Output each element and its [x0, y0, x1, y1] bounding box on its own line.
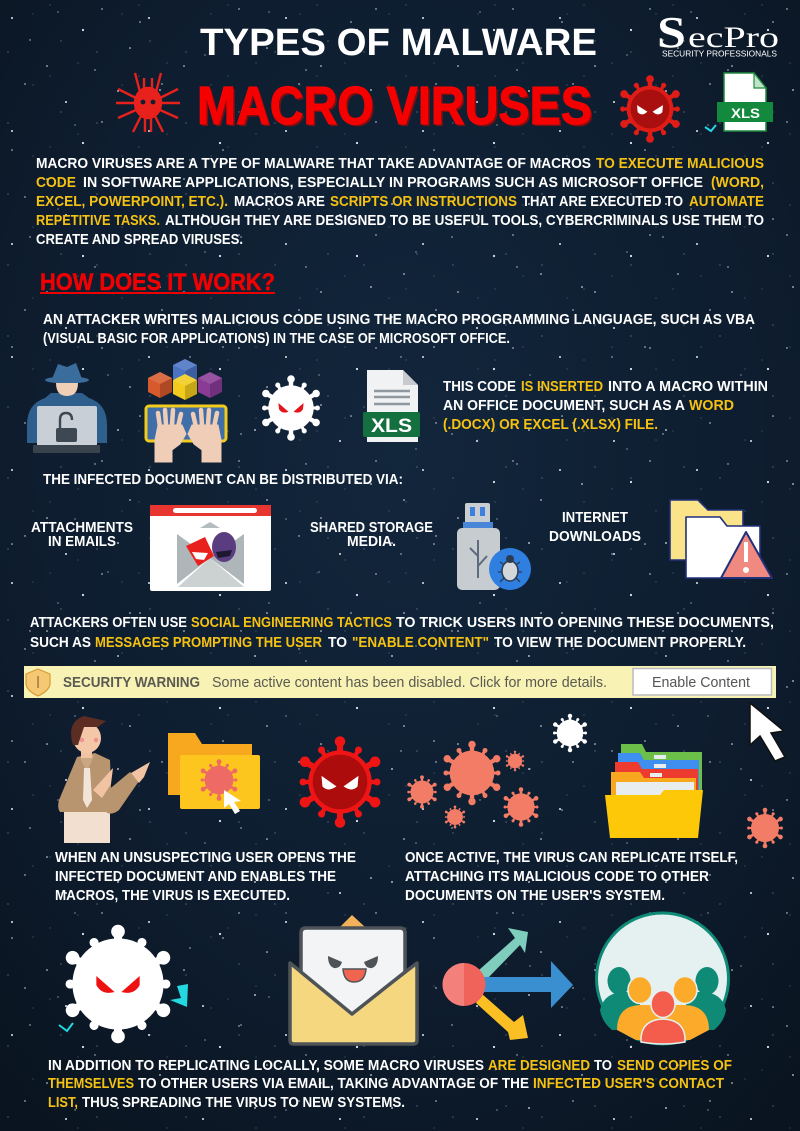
icon: red virus with angry eyes	[619, 75, 681, 143]
icon: typing on keyboard with code blocks	[146, 359, 226, 462]
text: code inserted into macro: INTO A MACRO WITHIN	[608, 379, 768, 395]
text: spreading by email: IN ADDITION TO REPLICATING LOCALLY, SOME MACRO VIRUSES	[48, 1058, 484, 1074]
text: spreading by email: INFECTED USER'S CONTACT	[533, 1076, 724, 1092]
text: code inserted into macro: IS INSERTED	[521, 379, 603, 395]
label: internet downloads	[549, 510, 641, 545]
icon: stack of colored folders	[605, 744, 703, 838]
text: user opens document: INFECTED DOCUMENT AND ENABLES THE	[55, 869, 336, 885]
text: spreading by email: THEMSELVES	[48, 1076, 134, 1092]
icon: XLS document: XLS	[371, 416, 412, 437]
icon: spreading arrows	[442, 928, 573, 1040]
icon: small XLS file: XLS	[731, 105, 760, 121]
text: code inserted into macro: WORD	[689, 398, 734, 414]
logo: SecPro: S	[657, 8, 686, 57]
text: virus replicates: DOCUMENTS ON THE USER'S SYSTEM.	[405, 888, 665, 904]
intro paragraph: IN SOFTWARE APPLICATIONS, ESPECIALLY IN PROGRAMS SUCH AS MICROSOFT OFFICE	[83, 175, 703, 191]
text: spreading by email	[48, 1058, 732, 1111]
icon: infected email window	[150, 505, 271, 591]
label: shared storage media: MEDIA.	[347, 534, 396, 550]
text: user opens document: WHEN AN UNSUSPECTING USER OPENS THE	[55, 850, 356, 866]
intro paragraph: THAT ARE EXECUTED TO	[522, 194, 683, 210]
heading: how does it work: HOW DOES IT WORK?	[40, 269, 275, 296]
text: attacker writes code	[43, 312, 755, 347]
label: shared storage media: SHARED STORAGE	[310, 520, 433, 536]
text: attacker writes code: (VISUAL BASIC FOR APPLICATIONS) IN THE CASE OF MICROSOFT OFFICE.	[43, 331, 510, 347]
text: virus replicates: ATTACHING ITS MALICIOUS CODE TO OTHER	[405, 869, 709, 885]
heading: macro viruses: MACRO VIRUSES	[199, 78, 594, 138]
text: user opens document: MACROS, THE VIRUS IS EXECUTED.	[55, 888, 290, 904]
label: shared storage media	[310, 520, 433, 550]
text: social engineering: ATTACKERS OFTEN USE	[30, 615, 187, 631]
text: code inserted into macro: THIS CODE	[443, 379, 516, 395]
title: types of malware: TYPES OF MALWARE	[200, 22, 597, 64]
security warning bar	[24, 666, 776, 698]
icon: mouse cursor	[750, 703, 785, 761]
text: virus replicates: ONCE ACTIVE, THE VIRUS CAN REPLICATE ITSELF,	[405, 850, 738, 866]
text: distribution intro: THE INFECTED DOCUMENT CAN BE DISTRIBUTED VIA:	[43, 472, 403, 488]
icon: envelope with smiling letter	[290, 915, 417, 1044]
icon: hacker with laptop	[27, 363, 107, 453]
label: attachments in emails	[31, 520, 133, 550]
text: code inserted into macro: (.DOCX) OR EXCEL (.XLSX) FILE.	[443, 417, 658, 433]
security warning bar: Some active content has been disabled. Click for more details.	[212, 675, 607, 691]
text: spreading by email: TO	[594, 1058, 612, 1074]
label: internet downloads: INTERNET	[562, 510, 628, 526]
text: user opens document	[55, 850, 356, 904]
heading: macro viruses: MACRO VIRUSES	[197, 76, 592, 136]
logo: SecPro	[657, 8, 779, 58]
icon: folders with warning	[670, 500, 772, 578]
icon: white virus	[261, 375, 321, 441]
icon: white virus splat	[552, 714, 588, 752]
text: spreading by email: THUS SPREADING THE VIRUS TO NEW SYSTEMS.	[82, 1095, 405, 1111]
text: social engineering	[30, 615, 774, 651]
security warning bar: Enable Content	[652, 675, 750, 691]
text: virus replicates	[405, 850, 738, 904]
intro paragraph	[36, 156, 764, 248]
intro paragraph: TO EXECUTE MALICIOUS	[596, 156, 764, 172]
illustration: man pointing	[58, 716, 150, 843]
icon: contact list group circle	[596, 913, 728, 1044]
text: spreading by email: SEND COPIES OF	[617, 1058, 732, 1074]
intro paragraph: AUTOMATE	[689, 194, 764, 210]
label: attachments in emails: ATTACHMENTS	[31, 520, 133, 536]
intro paragraph: REPETITIVE TASKS.	[36, 213, 160, 229]
icon: large white virus	[59, 925, 188, 1043]
logo: SecPro: ecPro	[688, 21, 779, 54]
icon: large red virus	[298, 736, 382, 828]
text: social engineering: TO VIEW THE DOCUMENT PROPERLY.	[494, 635, 746, 651]
text: code inserted into macro: AN OFFICE DOCUMENT, SUCH AS A	[443, 398, 685, 414]
intro paragraph: ALTHOUGH THEY ARE DESIGNED TO BE USEFUL TOOLS, CYBERCRIMINALS USE THEM TO	[165, 213, 764, 229]
icon: USB drive with bug	[457, 503, 531, 590]
icon: replicating pink viruses	[407, 741, 784, 848]
text: social engineering: TO TRICK USERS INTO OPENING THESE DOCUMENTS,	[396, 615, 774, 631]
text: spreading by email: ARE DESIGNED	[488, 1058, 590, 1074]
intro paragraph: MACROS ARE	[234, 194, 325, 210]
text: social engineering: SOCIAL ENGINEERING TACTICS	[191, 615, 392, 631]
logo: SecPro: SECURITY PROFESSIONALS	[662, 48, 777, 58]
text: spreading by email: TO OTHER USERS VIA EMAIL, TAKING ADVANTAGE OF THE	[138, 1076, 529, 1092]
intro paragraph: (WORD,	[711, 175, 764, 191]
icon: shield	[26, 669, 50, 696]
icon: XLS document	[363, 370, 420, 442]
text: code inserted into macro	[443, 379, 768, 433]
text: social engineering: TO	[328, 635, 347, 651]
text: attacker writes code: AN ATTACKER WRITES MALICIOUS CODE USING THE MACRO PROGRAMMING LANGUAGE, SUCH AS VBA	[43, 312, 755, 328]
intro paragraph: MACRO VIRUSES ARE A TYPE OF MALWARE THAT TAKE ADVANTAGE OF MACROS	[36, 156, 591, 172]
intro paragraph: SCRIPTS OR INSTRUCTIONS	[330, 194, 517, 210]
label: attachments in emails: IN EMAILS	[48, 534, 116, 550]
intro paragraph: CREATE AND SPREAD VIRUSES.	[36, 232, 243, 248]
icon: red spider bug	[116, 73, 180, 132]
label: internet downloads: DOWNLOADS	[549, 529, 641, 545]
icon: small XLS file	[705, 73, 773, 131]
intro paragraph: EXCEL, POWERPOINT, ETC.).	[36, 194, 228, 210]
text: spreading by email: LIST,	[48, 1095, 78, 1111]
text: social engineering: SUCH AS	[30, 635, 91, 651]
intro paragraph: CODE	[36, 175, 76, 191]
security warning bar: SECURITY WARNING	[63, 675, 200, 691]
icon: folder with virus and cursor	[168, 733, 260, 814]
text: social engineering: "ENABLE CONTENT"	[352, 635, 489, 651]
text: social engineering: MESSAGES PROMPTING THE USER	[95, 635, 322, 651]
